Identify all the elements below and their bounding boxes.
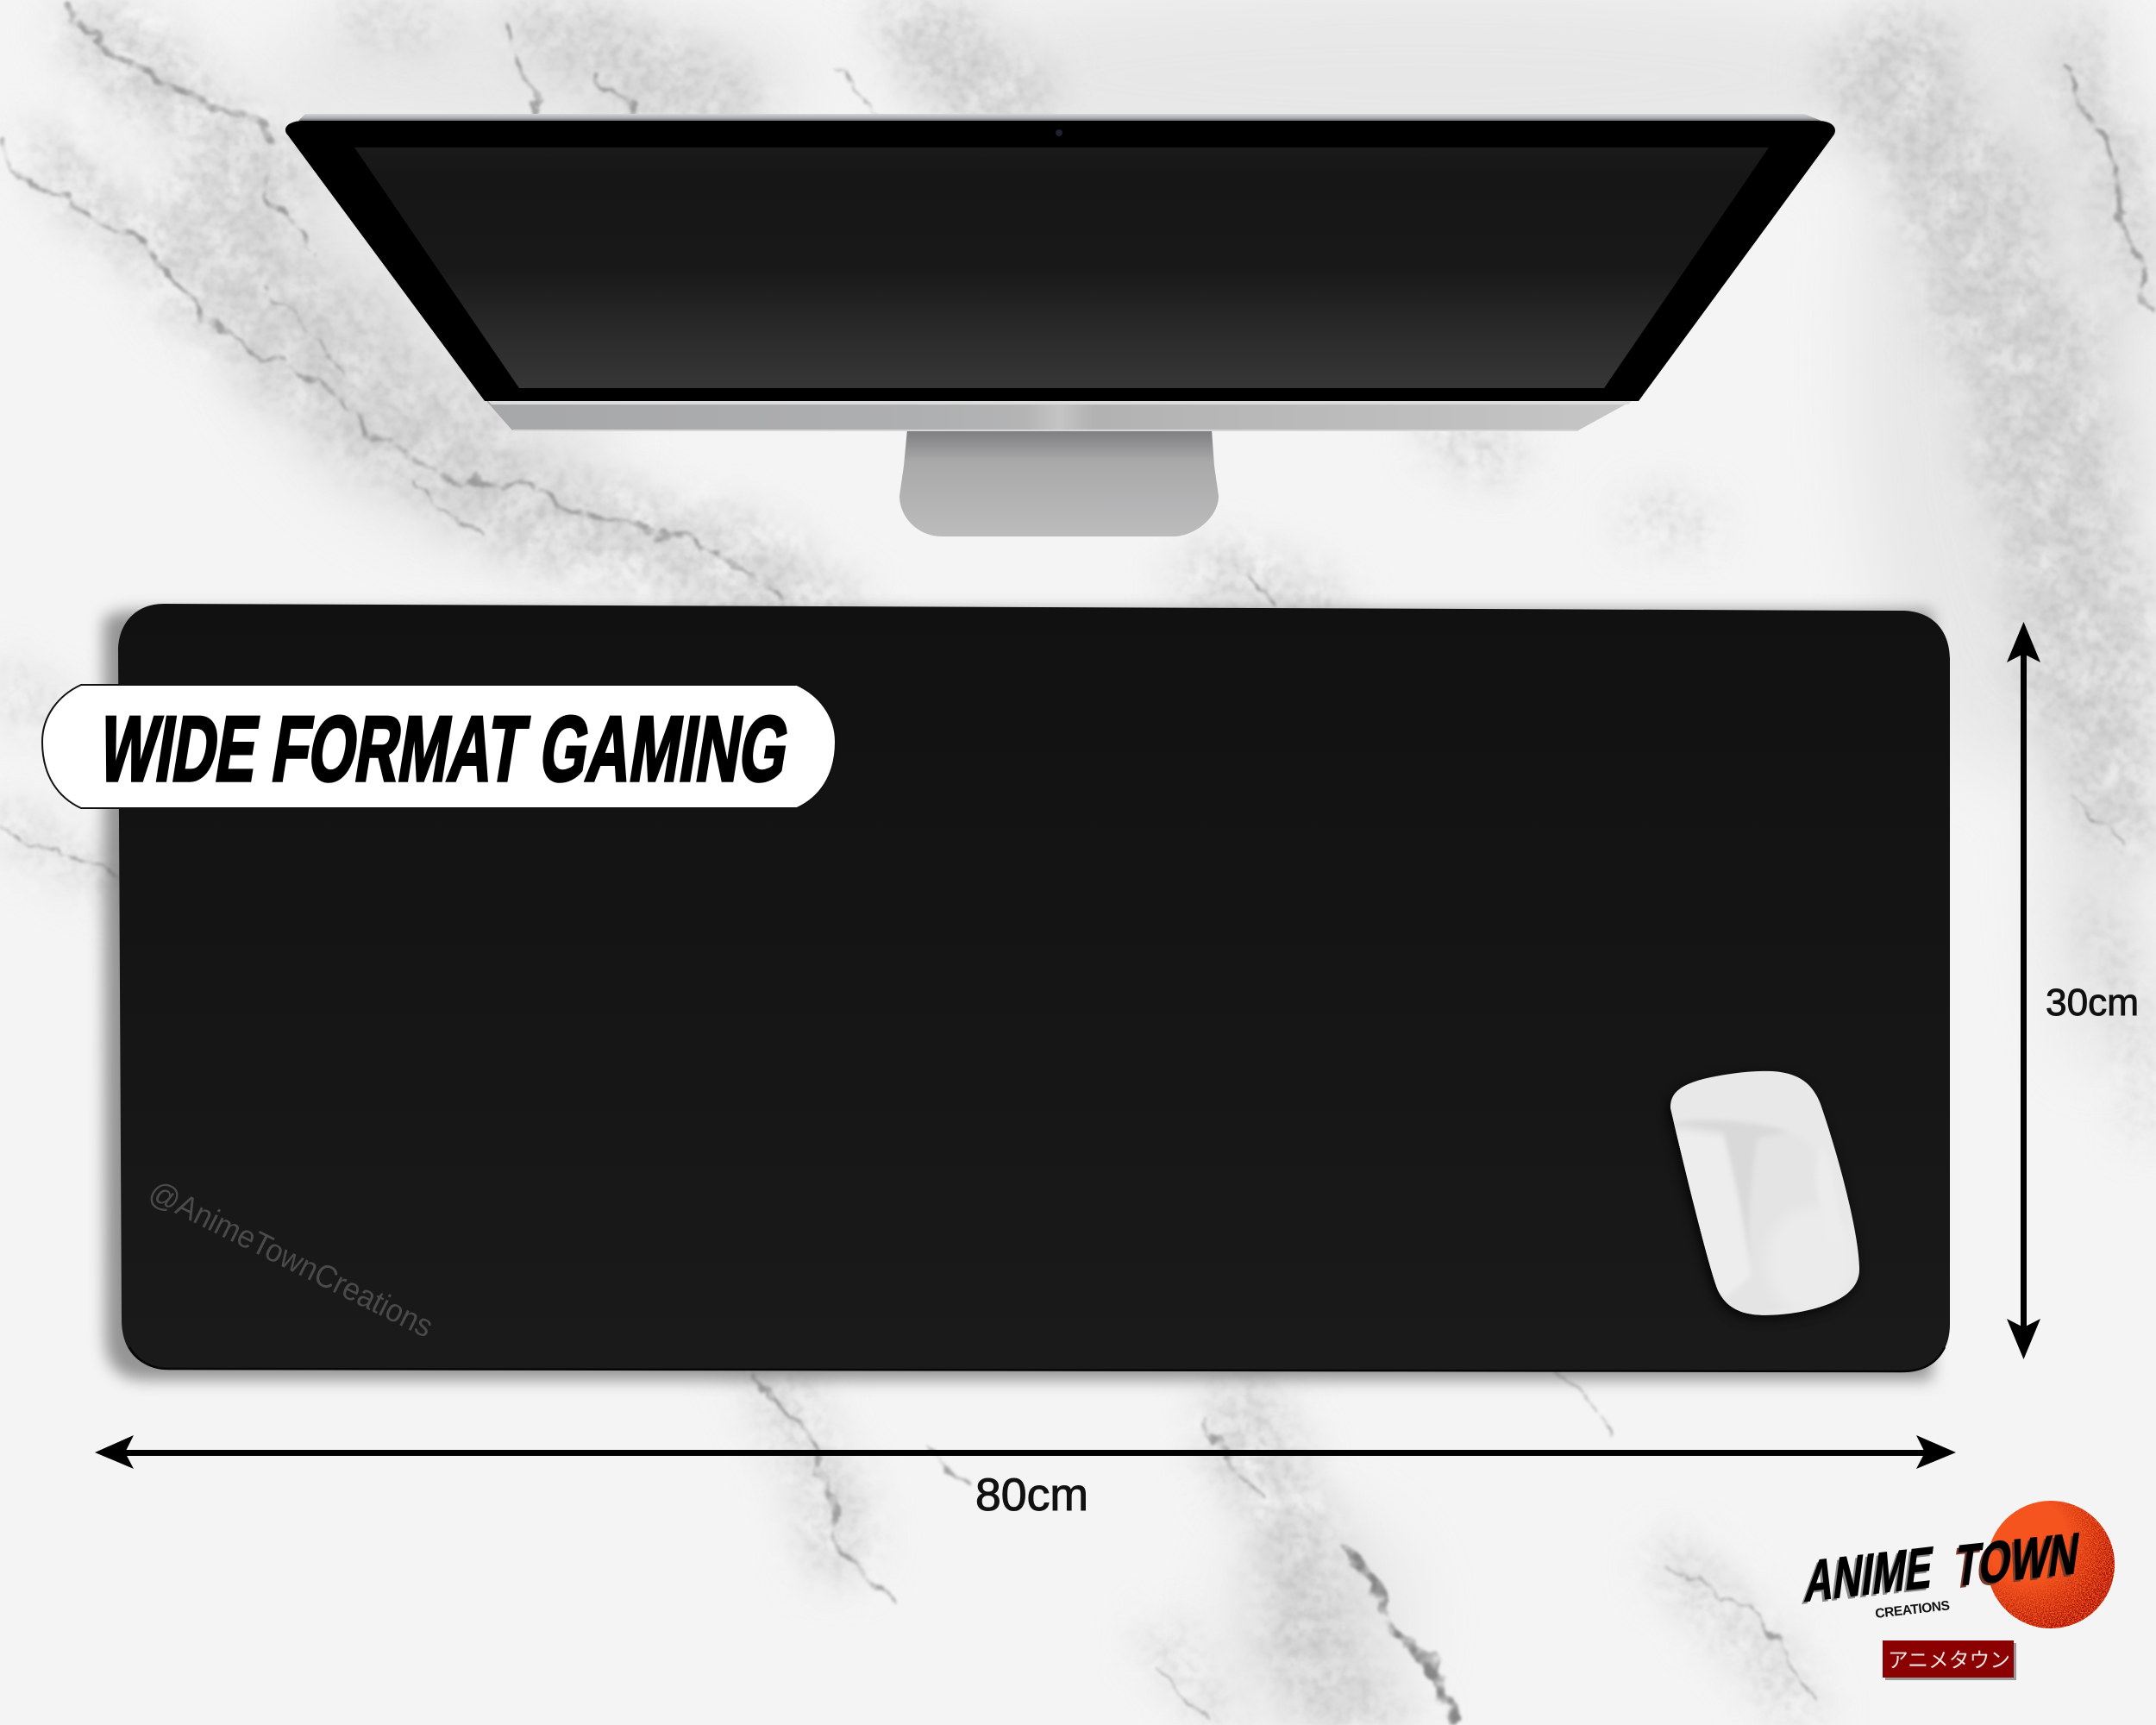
monitor stand xyxy=(899,430,1219,536)
logo japanese badge xyxy=(1883,1640,2016,1680)
watermark: @AnimeTownCreations xyxy=(143,1173,439,1345)
mouse shadow xyxy=(1668,1075,1857,1319)
monitor xyxy=(285,114,1835,536)
arrow: 80cm width xyxy=(95,1435,1956,1469)
logo word: anime: ANIME xyxy=(1802,1534,1937,1615)
logo: anime town creations xyxy=(1799,1497,2118,1680)
logo sun circle xyxy=(1987,1501,2115,1628)
logo japanese badge: アニメタウン xyxy=(1888,1649,2010,1672)
monitor top lip xyxy=(298,114,1821,121)
mouse body xyxy=(1670,1071,1859,1315)
logo word: anime xyxy=(1799,1534,1937,1617)
logo word: anime: ANIME xyxy=(1799,1537,1934,1617)
monitor bezel xyxy=(285,121,1835,401)
monitor chin xyxy=(486,401,1632,431)
monitor camera xyxy=(1056,129,1062,136)
arrow: 30cm height xyxy=(2007,622,2040,1359)
label: 30cm: 30cm xyxy=(2046,982,2139,1024)
desk mat xyxy=(118,604,1950,1371)
monitor screen xyxy=(354,147,1769,388)
mouse xyxy=(1668,1071,1859,1320)
logo word: town: TOWN xyxy=(1952,1521,2084,1599)
label: 80cm: 80cm xyxy=(975,1470,1088,1521)
title pill: wide format gaming xyxy=(42,685,836,808)
logo word: town: TOWN xyxy=(1949,1523,2081,1602)
logo word: creations: CREATIONS xyxy=(1875,1598,1951,1622)
desk mat shadow xyxy=(103,611,1932,1380)
title text: WIDE FORMAT GAMING xyxy=(93,698,796,800)
